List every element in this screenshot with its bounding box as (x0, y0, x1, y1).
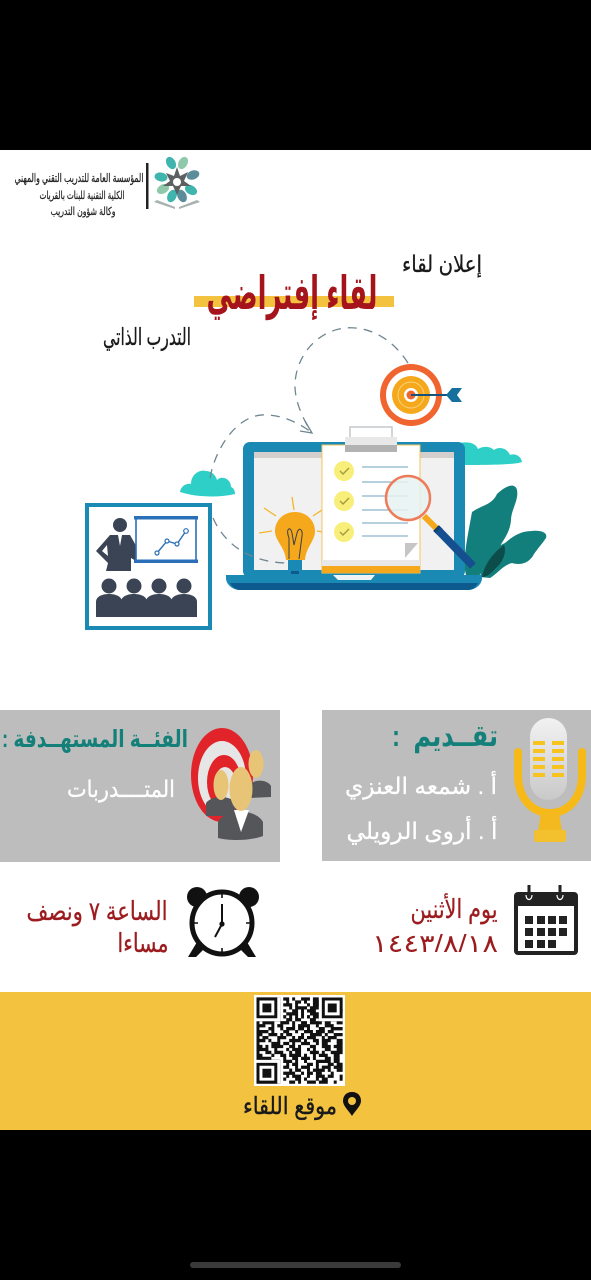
illustration: laptop scene (180, 328, 546, 590)
panel: target audience (0, 710, 280, 862)
subtitle: self training: التدرب الذاتي (103, 324, 191, 351)
title with yellow bar: لقاء إفتراضي (206, 267, 378, 321)
QR finder patterns (256, 998, 343, 1084)
icon: check marks (334, 461, 354, 542)
icon: right cloud (460, 442, 522, 465)
icon: leaves (465, 486, 546, 578)
icon: alarm clock (187, 887, 259, 957)
logo block (14, 155, 201, 218)
icon: microphone (518, 718, 582, 842)
icon: presenter and audience box (87, 505, 210, 628)
text: day: يوم الأثنين (410, 892, 498, 925)
title with yellow bar (194, 267, 394, 321)
text: date: ١٤٤٣/٨/١٨ (372, 930, 498, 958)
white poster page (0, 150, 591, 992)
organisation name text: الكلية التقنية للبنات بالقريات (40, 190, 124, 202)
audience (96, 578, 197, 617)
organisation name text: وكالة شؤون التدريب (50, 206, 116, 218)
clipboard checklist (322, 427, 420, 573)
text: second presenter: أ . أروى الرويلي (346, 816, 498, 845)
organisation name text: المؤسسة العامة للتدريب التقني والمهني (14, 171, 144, 186)
time block (26, 887, 259, 958)
heading: presented by: تقــديم : (392, 720, 498, 754)
icon: calendar (514, 885, 578, 955)
text: first presenter: أ . شمعه العنزي (345, 771, 497, 800)
dashed path arrows (210, 328, 408, 563)
icon: target with people (191, 728, 271, 840)
presenter (96, 518, 158, 571)
time block: مساءا (118, 928, 168, 958)
home indicator (190, 1262, 401, 1268)
icon: logo star (154, 155, 201, 209)
heading: target group: الفئــة المستهــدفة : (2, 726, 188, 753)
text: meeting location: موقع اللقاء (243, 1093, 337, 1120)
organisation name text (14, 171, 144, 218)
icon: magnifying glass (386, 476, 473, 566)
icon: target with arrow (380, 364, 462, 426)
text: trainees: المتــــدربات (67, 776, 175, 803)
icon: light bulb (259, 497, 329, 574)
text: time: الساعة ٧ ونصف (26, 896, 168, 927)
date block (372, 885, 578, 958)
presentation board (134, 516, 198, 563)
laptop (226, 442, 482, 590)
QR code (254, 995, 345, 1086)
heading: announcement: إعلان لقاء (402, 251, 482, 278)
panel: presenters (322, 710, 591, 861)
panel: yellow location band (0, 992, 591, 1130)
icon: left cloud (180, 471, 235, 496)
icon: location pin (343, 1092, 361, 1116)
